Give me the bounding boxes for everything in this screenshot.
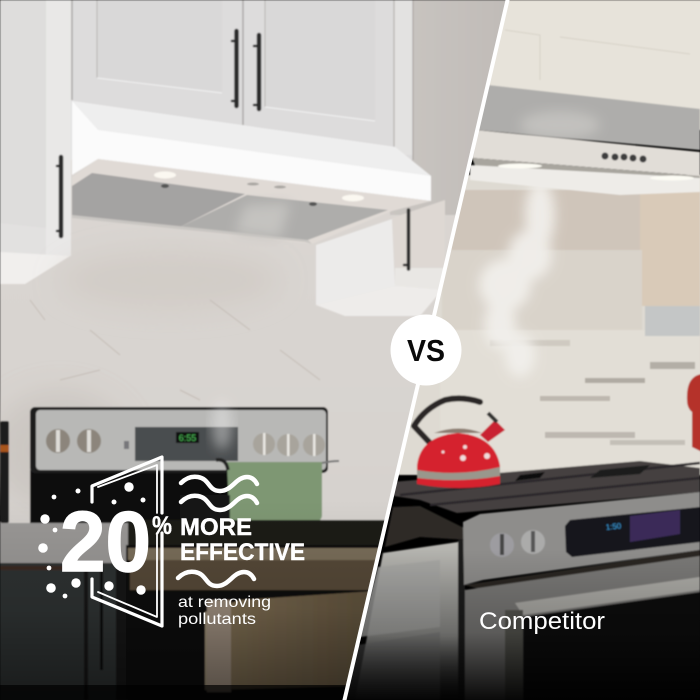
pollutant dots — [38, 482, 146, 598]
text: more effective: EFFECTIVE — [180, 539, 305, 566]
upper wall — [390, 0, 506, 215]
cabinet handles — [57, 31, 408, 269]
divider line — [344, 0, 508, 700]
countertop — [385, 506, 470, 547]
bottle — [0, 421, 9, 523]
oven door — [465, 556, 700, 700]
headline stat: 20%: % — [152, 512, 172, 540]
stove back panel: 6:55 — [179, 433, 196, 443]
icon: air wave below — [178, 572, 254, 586]
VS badge: VS — [407, 333, 445, 368]
upper cabinet — [490, 0, 700, 131]
stove back panel — [30, 407, 328, 526]
icon: air waves above — [181, 477, 257, 510]
label: Competitor: Competitor — [479, 608, 605, 635]
text: at removing pollutants — [178, 594, 271, 628]
range hood — [72, 101, 431, 244]
upper cabinet doors — [71, 0, 413, 160]
left wall cabinet — [0, 0, 71, 284]
VS badge — [390, 314, 462, 386]
steam — [212, 400, 232, 450]
grates — [392, 461, 700, 513]
panel: right competitor scene — [340, 0, 700, 700]
dark bottom overlay — [346, 566, 700, 700]
text: at removing pollutants: pollutants — [178, 611, 256, 628]
green pot — [180, 460, 339, 522]
headline stat: 20%: 20 — [60, 495, 151, 590]
steam plume — [479, 180, 555, 377]
range hood — [470, 85, 700, 195]
text: more effective — [180, 514, 305, 566]
small right cabinet — [316, 200, 445, 316]
icon: filter frame with pollutants — [38, 457, 162, 626]
red kettle — [414, 398, 505, 488]
panel: left kitchen scene — [0, 0, 520, 700]
stove front: 1:50 — [605, 521, 622, 532]
stove front — [463, 492, 700, 590]
countertop and base cabinets — [0, 520, 390, 700]
text: more effective: MORE — [180, 514, 252, 541]
dark bottom overlay — [0, 548, 368, 693]
text: at removing pollutants: at removing — [178, 594, 271, 611]
marble backsplash shading — [86, 261, 254, 300]
filter frame — [92, 457, 162, 626]
tiled backsplash — [398, 174, 700, 476]
lower cabinet — [345, 540, 465, 700]
red pot edge — [687, 374, 700, 452]
